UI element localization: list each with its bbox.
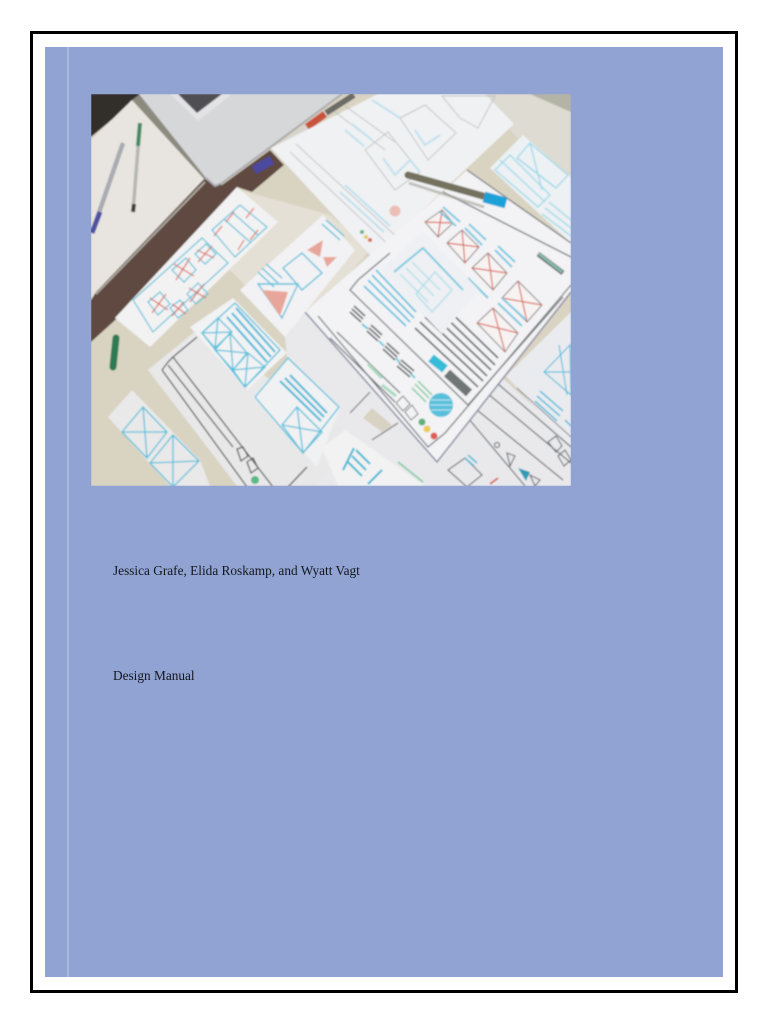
desk	[91, 94, 571, 486]
brown wood strip	[91, 150, 284, 342]
green marker	[113, 338, 116, 367]
main wireframe sheet	[305, 170, 571, 462]
pens at top	[284, 112, 327, 140]
bottom sketch with blue scribble	[322, 430, 477, 486]
laptop	[139, 94, 342, 186]
cover photo: wireframe sketches on a desk	[91, 94, 571, 486]
marker pen	[408, 175, 506, 207]
strip sheet with icons	[115, 187, 278, 347]
light sheets below main	[285, 312, 571, 487]
notebook with pens	[91, 94, 212, 300]
authors line: Jessica Grafe, Elida Roskamp, and Wyatt Vagt	[113, 563, 360, 578]
right top sheet	[490, 135, 571, 243]
large browser sheet	[148, 332, 308, 486]
document title: Design Manual	[113, 668, 195, 683]
small x-box strip bottom left	[108, 390, 210, 487]
drawn sheet with red hatching	[240, 215, 355, 337]
right lower sheet	[506, 312, 571, 446]
top wireframe sheet	[271, 94, 514, 257]
blue wire sheets on large sheet	[190, 298, 340, 467]
vertical light stripe	[67, 47, 69, 977]
overlay sheet on main	[389, 246, 480, 334]
